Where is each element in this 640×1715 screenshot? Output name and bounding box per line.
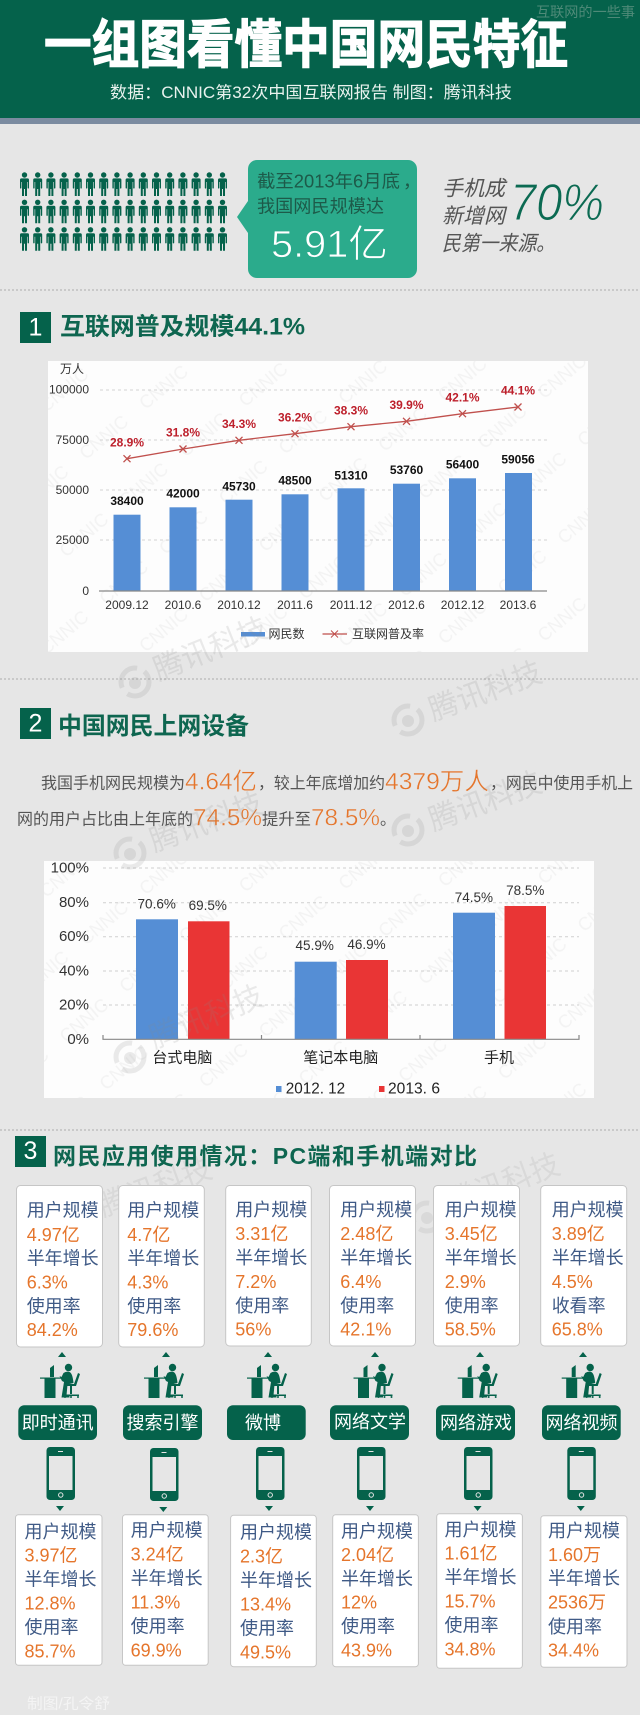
- mobile card: 即时通讯: 使用率: [24, 1618, 78, 1638]
- bars 2012.12: [136, 913, 495, 1039]
- bar values: 38400: [110, 494, 144, 508]
- penetration values: [110, 384, 535, 450]
- penetration line: [124, 404, 522, 462]
- paragraph: mobile users: [17, 768, 633, 832]
- penetration values: 34.3%: [222, 417, 256, 431]
- subtitle: 数据：CNNIC第32次中国互联网报告 制图：腾讯科技: [110, 83, 512, 102]
- categories: 笔记本电脑: [303, 1050, 378, 1066]
- pc card: 微博: 用户规模: [235, 1200, 307, 1220]
- mobile card: 搜索引擎: 3.24亿: [131, 1545, 184, 1565]
- y axis: [51, 860, 89, 1048]
- pc card: 网络游戏: 用户规模: [445, 1200, 517, 1220]
- section 3 heading: 网民应用使用情况：PC端和手机端对比: [53, 1143, 477, 1169]
- mobile 70% note: 70%: [510, 174, 604, 232]
- bar values: 69.5%: [189, 898, 227, 913]
- mobile card: 网络视频: 用户规模: [548, 1521, 620, 1541]
- y axis labels: 25000: [56, 533, 89, 547]
- pc card: 微博: [226, 1186, 311, 1346]
- mobile card: 搜索引擎: 用户规模: [131, 1521, 203, 1541]
- bars: [114, 473, 532, 591]
- mobile card: 网络文学: 用户规模: [341, 1521, 413, 1541]
- paragraph: mobile users: 4379万人: [385, 768, 489, 796]
- label: 网络游戏: 网络游戏: [440, 1413, 512, 1433]
- watermark: 腾讯科技 over sections 1 and 2: 腾讯科技: [145, 980, 268, 1055]
- label: 网络视频: 网络视频: [546, 1413, 618, 1433]
- label: 搜索引擎: 搜索引擎: [126, 1413, 198, 1433]
- mobile card: 微博: 使用率: [240, 1619, 294, 1639]
- pc card: 微博: 3.31亿: [235, 1224, 288, 1244]
- pc card: 网络文学: 半年增长: [340, 1248, 412, 1268]
- pc card: 即时通讯: 使用率: [27, 1297, 81, 1317]
- paragraph: mobile users: 我国手机网民规模为: [41, 774, 185, 792]
- categories: 手机: [484, 1050, 514, 1066]
- pc card: 微博: 56%: [235, 1320, 271, 1340]
- pc card: 网络文学: 2.48亿: [340, 1224, 393, 1244]
- penetration values: 44.1%: [501, 384, 535, 398]
- pc card: 网络文学: 6.4%: [340, 1272, 381, 1292]
- x axis labels: 2010.12: [217, 598, 261, 612]
- section 1 heading: 互联网普及规模44.1%: [60, 314, 305, 340]
- mobile card: 网络游戏: 15.7%: [444, 1591, 496, 1611]
- pc card: 网络视频: 半年增长: [552, 1248, 624, 1268]
- mobile card: 网络视频: [541, 1516, 627, 1667]
- x axis labels: 2012.12: [441, 598, 485, 612]
- pc card: 搜索引擎: 使用率: [127, 1297, 181, 1317]
- categories: 台式电脑: [152, 1050, 212, 1066]
- mobile card: 网络视频: 1.60万: [548, 1545, 601, 1565]
- label: 即时通讯: 即时通讯: [22, 1413, 94, 1433]
- pc card: 搜索引擎: 半年增长: [127, 1249, 199, 1269]
- mobile card: 网络文学: [333, 1515, 418, 1667]
- paragraph: mobile users: 网的用户占比由上年底的: [17, 810, 193, 828]
- callout: 5.91亿: ，: [403, 172, 421, 192]
- x axis labels: [105, 598, 537, 612]
- y axis labels: 75000: [56, 433, 89, 447]
- bar values: 70.6%: [138, 896, 176, 912]
- mobile card: 搜索引擎: [122, 1515, 208, 1665]
- label: 网络文学: 网络文学: [334, 1412, 406, 1432]
- mobile card: 网络视频: 使用率: [548, 1617, 602, 1637]
- mobile card: 微博: [231, 1515, 316, 1667]
- section 2 heading: [20, 708, 249, 740]
- icon grid: people: [20, 172, 227, 251]
- watermark: 腾讯科技 over sections 1 and 2: 腾讯科技: [149, 612, 272, 687]
- pc card: 搜索引擎: 79.6%: [127, 1320, 178, 1340]
- mobile card: 微博: 2.3亿: [240, 1547, 283, 1567]
- bar values: 53760: [390, 463, 424, 477]
- pc card: 搜索引擎: 4.3%: [127, 1273, 168, 1293]
- y axis: 100%: [51, 860, 89, 876]
- bar values: 48500: [278, 474, 312, 488]
- legend: 互联网普及率: [352, 626, 424, 641]
- mobile card: 微博: 49.5%: [240, 1642, 291, 1662]
- bar values: 74.5%: [455, 890, 493, 905]
- legend: [276, 1080, 440, 1098]
- mobile card: 搜索引擎: 半年增长: [131, 1568, 203, 1588]
- watermark: 腾讯科技 over sections 1 and 2: 腾讯科技: [424, 766, 547, 838]
- watermark: 腾讯科技 behind section 3 cards: 腾讯科技: [94, 1152, 217, 1224]
- bar values: 45.9%: [296, 938, 334, 953]
- x axis labels: 2009.12: [105, 598, 149, 612]
- pc card: 网络文学: 使用率: [340, 1296, 394, 1316]
- pc card: 即时通讯: 84.2%: [27, 1320, 78, 1340]
- penetration values: 42.1%: [445, 391, 480, 405]
- mobile card: 搜索引擎: 11.3%: [131, 1593, 180, 1613]
- mobile card: 即时通讯: 85.7%: [24, 1641, 76, 1661]
- y axis labels: [49, 362, 89, 598]
- pc card: 网络游戏: 3.45亿: [445, 1224, 498, 1244]
- pc card: 即时通讯: 半年增长: [27, 1249, 99, 1269]
- label: 网络游戏: [436, 1405, 515, 1440]
- mobile card: 微博: 半年增长: [240, 1570, 312, 1590]
- pc card: 搜索引擎: [119, 1186, 204, 1347]
- x axis labels: 2013.6: [500, 598, 537, 612]
- pc card: 网络文学: 42.1%: [340, 1320, 391, 1340]
- watermark: 腾讯科技 over sections 1 and 2: 腾讯科技: [424, 656, 547, 728]
- pc card: 网络游戏: 58.5%: [445, 1320, 496, 1340]
- chart: internet users and penetration: [48, 361, 588, 652]
- mobile card: 网络视频: 2536万: [548, 1593, 606, 1613]
- pc card: 网络视频: 用户规模: [552, 1200, 624, 1220]
- mobile card: 网络视频: 半年增长: [548, 1569, 620, 1589]
- chart: devices: [44, 860, 594, 1098]
- pc card: 网络视频: 3.89亿: [552, 1224, 605, 1244]
- mobile card: 即时通讯: 半年增长: [24, 1569, 96, 1589]
- bars 2013.6: [188, 906, 546, 1039]
- icons: up arrows and desktop users: [40, 1352, 602, 1398]
- mobile card: 即时通讯: [16, 1515, 102, 1665]
- section 2 heading: 中国网民上网设备: [58, 713, 249, 740]
- legend: 网民数: [268, 626, 305, 641]
- pc card: 微博: 使用率: [235, 1296, 289, 1316]
- label: 微博: [227, 1405, 306, 1440]
- pc card: 网络游戏: 2.9%: [445, 1272, 486, 1292]
- y axis labels: 万人: [60, 362, 84, 376]
- penetration values: 39.9%: [389, 398, 424, 412]
- pc card: 即时通讯: [16, 1186, 102, 1347]
- callout: 5.91亿: 我国网民规模达: [257, 197, 384, 217]
- pc card: 网络游戏: 使用率: [445, 1296, 499, 1316]
- mobile card: 网络文学: 使用率: [341, 1617, 395, 1637]
- mobile card: 网络文学: 12%: [341, 1593, 377, 1613]
- y axis labels: 0: [82, 584, 89, 598]
- bar values: 46.9%: [347, 937, 386, 952]
- mobile card: 即时通讯: 用户规模: [24, 1522, 96, 1542]
- pc card: 搜索引擎: 用户规模: [127, 1201, 199, 1221]
- label: 搜索引擎: [123, 1405, 202, 1440]
- mobile card: 搜索引擎: 69.9%: [131, 1640, 182, 1660]
- y axis: 60%: [59, 928, 89, 945]
- icons: phones and down arrows: [46, 1447, 596, 1512]
- y axis: 20%: [59, 996, 89, 1014]
- credit: 制图/孔令舒: [27, 1696, 110, 1712]
- mobile 70% note: 手机成: [442, 178, 508, 200]
- penetration values: 28.9%: [110, 436, 144, 450]
- bar values: 59056: [501, 452, 535, 466]
- pc card: 网络文学: 用户规模: [340, 1200, 412, 1220]
- mobile 70% note: 民第一来源。: [442, 232, 555, 256]
- y axis labels: 50000: [56, 483, 89, 497]
- label: 即时通讯: [18, 1405, 97, 1440]
- bar values: 42000: [166, 487, 200, 501]
- pc card: 网络视频: [541, 1186, 627, 1346]
- pc card: 网络游戏: [434, 1186, 520, 1346]
- penetration values: 38.3%: [334, 403, 368, 417]
- y axis: 0%: [67, 1031, 89, 1048]
- penetration values: 31.8%: [166, 426, 200, 440]
- legend: 2012. 12: [286, 1080, 345, 1098]
- section 1 heading: 1: [29, 314, 42, 342]
- mobile card: 微博: 13.4%: [240, 1595, 291, 1615]
- paragraph: mobile users: 74.5%: [193, 804, 262, 832]
- mobile card: 网络游戏: 使用率: [444, 1616, 498, 1636]
- mobile card: 网络游戏: 34.8%: [444, 1639, 496, 1659]
- y axis labels: 100000: [49, 383, 89, 397]
- pc card: 网络游戏: 半年增长: [445, 1248, 517, 1268]
- watermark: 腾讯科技 behind section 3 cards: 腾讯科技: [442, 1148, 565, 1220]
- pc card: 即时通讯: 6.3%: [27, 1273, 68, 1293]
- x axis labels: 2011.6: [277, 598, 313, 612]
- pc card: 微博: 7.2%: [235, 1272, 276, 1292]
- mobile card: 即时通讯: 12.8%: [24, 1594, 76, 1614]
- mobile card: 网络游戏: 用户规模: [444, 1520, 516, 1540]
- paragraph: mobile users: 4.64亿: [185, 768, 257, 796]
- watermark: 腾讯科技 over sections 1 and 2: 腾讯科技: [145, 787, 268, 859]
- section 2 heading: 2: [29, 710, 42, 738]
- pc card: 搜索引擎: 4.7亿: [127, 1225, 170, 1245]
- bar values: 51310: [334, 468, 368, 482]
- mobile card: 网络文学: 半年增长: [341, 1569, 413, 1589]
- bar values: [110, 452, 535, 508]
- pc card: 网络文学: [330, 1186, 416, 1346]
- mobile card: 即时通讯: 3.97亿: [24, 1546, 78, 1566]
- mobile card: 网络文学: 43.9%: [341, 1640, 392, 1660]
- y axis: 40%: [59, 962, 89, 980]
- header banner: [0, 0, 640, 124]
- paragraph: mobile users: 。: [380, 812, 396, 828]
- bar values: [138, 883, 544, 953]
- mobile card: 网络视频: 34.4%: [548, 1640, 599, 1660]
- mobile card: 微博: 用户规模: [240, 1523, 312, 1543]
- pc card: 网络视频: 4.5%: [552, 1272, 593, 1292]
- label: 网络视频: [542, 1405, 621, 1440]
- paragraph: mobile users: 提升至: [262, 810, 311, 828]
- watermark: 腾讯科技 behind section 3 cards: [66, 1148, 565, 1237]
- mobile card: 搜索引擎: 使用率: [131, 1617, 185, 1637]
- mobile card: 网络文学: 2.04亿: [341, 1545, 394, 1565]
- watermark: 腾讯科技 over sections 1 and 2: [116, 612, 547, 1071]
- callout: 5.91亿: [237, 160, 421, 278]
- bar values: 56400: [446, 458, 480, 472]
- section 3 heading: 3: [24, 1137, 37, 1165]
- x axis labels: 2010.6: [165, 598, 202, 612]
- title: 一组图看懂中国网民特征: [44, 17, 568, 75]
- callout: 5.91亿: 5.91亿: [271, 224, 388, 266]
- penetration values: 36.2%: [278, 410, 312, 424]
- pc card: 网络视频: 收看率: [552, 1296, 606, 1316]
- label: 微博: 微博: [245, 1413, 281, 1433]
- mobile card: 网络游戏: [437, 1514, 522, 1668]
- x axis labels: 2012.6: [388, 598, 425, 612]
- y axis: 80%: [59, 894, 89, 911]
- mobile card: 网络游戏: 半年增长: [444, 1568, 516, 1588]
- pc card: 即时通讯: 4.97亿: [27, 1225, 80, 1245]
- bar values: 45730: [222, 479, 256, 493]
- paragraph: mobile users: ，较上年底增加约: [258, 774, 385, 792]
- legend: [241, 626, 424, 641]
- pc card: 即时通讯: 用户规模: [27, 1201, 99, 1221]
- pc card: 网络视频: 65.8%: [552, 1320, 603, 1340]
- paragraph: mobile users: 78.5%: [311, 804, 380, 832]
- pc card: 微博: 半年增长: [235, 1248, 307, 1268]
- paragraph: mobile users: ，网民中使用手机上: [490, 774, 633, 792]
- label: 网络文学: [330, 1405, 409, 1440]
- mobile card: 网络游戏: 1.61亿: [444, 1544, 498, 1564]
- callout: 5.91亿: 截至2013年6月底: [257, 172, 400, 192]
- source mark top right: 互联网的一些事: [536, 4, 635, 20]
- legend: 2013. 6: [388, 1080, 440, 1098]
- mobile 70% note: 新增网: [442, 205, 508, 228]
- x axis labels: 2011.12: [330, 598, 373, 612]
- categories: [152, 1050, 514, 1066]
- mobile 70% note: [442, 174, 604, 256]
- bar values: 78.5%: [506, 883, 544, 898]
